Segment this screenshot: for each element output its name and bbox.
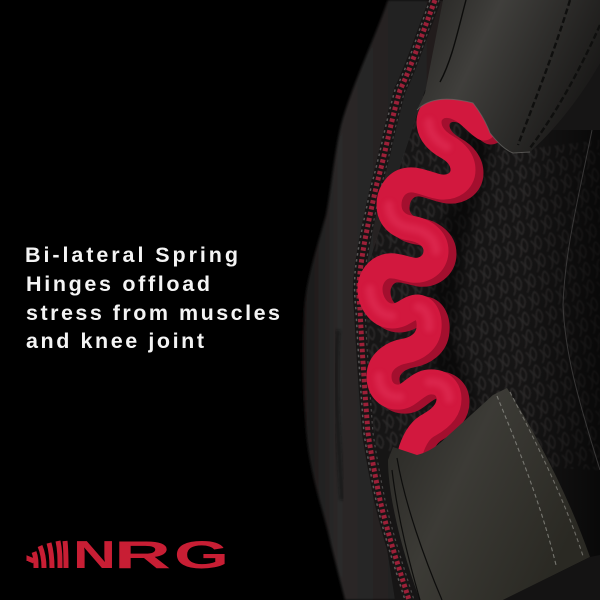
upper fabric pad	[417, 0, 600, 153]
spring shadow	[430, 130, 480, 440]
logo wordmark	[73, 534, 229, 577]
bottom hem fabric	[503, 555, 600, 600]
feature text: Hinges offload	[26, 272, 210, 296]
NRG logo	[29, 534, 229, 577]
lower fabric pad	[388, 388, 600, 600]
logo wordmark: R	[114, 534, 171, 577]
feature text: and knee joint	[26, 329, 204, 353]
knee sleeve fabric	[303, 0, 600, 600]
right side shadow	[520, 130, 600, 600]
icon: signal arcs	[29, 541, 66, 568]
logo wordmark: G	[174, 534, 229, 577]
feature text: stress from muscles	[26, 301, 280, 325]
logo wordmark: N	[73, 534, 116, 577]
right seam line	[563, 130, 600, 470]
spring front face	[370, 105, 484, 450]
feature text: Bi-lateral Spring	[25, 243, 238, 267]
feature text	[25, 243, 280, 353]
mesh panel	[362, 60, 600, 600]
zipper with red and grey teeth	[355, 0, 439, 600]
left neoprene seam	[336, 330, 342, 500]
spring side face	[377, 108, 491, 453]
spring highlight	[370, 122, 449, 399]
red spring hinge	[370, 105, 491, 453]
